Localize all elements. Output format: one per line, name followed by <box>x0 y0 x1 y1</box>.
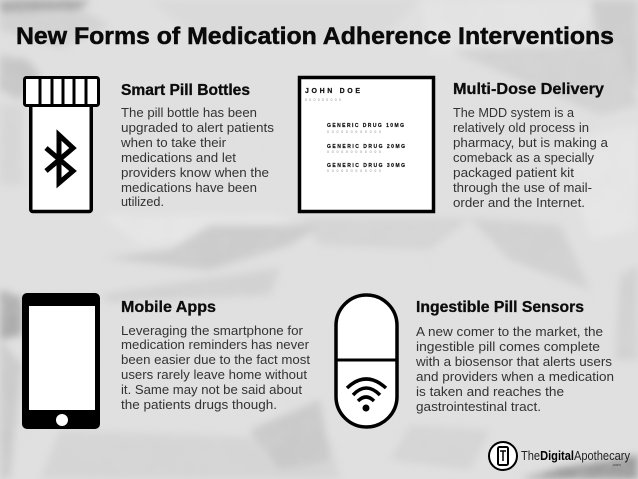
panel: ingestible pill sensors text: Ingestible Pill Sensors <box>416 299 584 316</box>
icon: multi-dose label: GENERIC DRUG 10MG <box>327 123 404 129</box>
panel: smart pill bottles text: Smart Pill Bottles <box>121 82 250 99</box>
panel: mobile apps text: medication reminders has never <box>121 338 309 352</box>
panel: multi-dose delivery text <box>453 81 608 210</box>
panel: multi-dose delivery text: Multi-Dose Delivery <box>453 81 604 98</box>
panel: mobile apps text: users rarely leave home without <box>121 368 308 382</box>
panel: ingestible pill sensors text: and providers when a medication <box>416 370 614 384</box>
panel: ingestible pill sensors text: with a biosensor that alerts users <box>415 355 612 369</box>
logo: The Digital Apothecary <box>489 442 631 470</box>
panel: smart pill bottles text: upgraded to alert patients <box>121 121 274 135</box>
panel: multi-dose delivery text: comeback as a specially <box>453 151 595 165</box>
panel: mobile apps text <box>121 299 311 412</box>
panel: ingestible pill sensors text <box>415 299 614 414</box>
panel: smart pill bottles text: medications and let <box>121 151 237 165</box>
panel: smart pill bottles text: medications have been <box>121 181 257 195</box>
panel: ingestible pill sensors text: A new comer to the market, the <box>416 325 603 339</box>
panel: mobile apps text: it. Same may not be said about <box>121 383 303 397</box>
panel: mobile apps text: Mobile Apps <box>121 299 216 316</box>
panel: ingestible pill sensors text: gastrointestinal tract. <box>416 400 541 414</box>
panel: mobile apps text: the patients drugs though. <box>121 398 277 412</box>
panel: smart pill bottles text: when to take their <box>120 136 226 150</box>
icon: multi-dose label: 0 0 0 0 0 0 0 0 0 0 0 0 <box>327 130 381 134</box>
panel: mobile apps text: been easier due to the fact most <box>121 353 311 367</box>
icon: mobile phone <box>22 293 100 429</box>
icon: multi-dose label: GENERIC DRUG 20MG <box>327 144 405 150</box>
icon: multi-dose label: JOHN DOE <box>305 88 360 95</box>
panel: smart pill bottles text: utilized. <box>121 195 164 209</box>
panel: multi-dose delivery text: relatively old process in <box>453 121 589 135</box>
icon: multi-dose label: 0 0 0 0 0 0 0 0 0 0 0 0 <box>327 150 381 154</box>
panel: ingestible pill sensors text: ingestible pill comes complete <box>416 340 600 354</box>
panel: multi-dose delivery text: through the use of mail- <box>453 181 592 195</box>
icon: smart pill bottle <box>24 78 98 212</box>
panel: multi-dose delivery text: The MDD system is a <box>453 106 574 120</box>
panel: smart pill bottles text <box>120 82 274 209</box>
icon: wifi signal <box>347 379 386 412</box>
icon: ingestible pill sensor <box>335 295 398 427</box>
logo: The Digital Apothecary: .com <box>612 462 621 467</box>
icon: bluetooth symbol <box>46 135 73 183</box>
title: New Forms of Medication Adherence Interventions <box>16 23 614 50</box>
panel: multi-dose delivery text: pharmacy, but is making a <box>453 136 608 150</box>
panel: smart pill bottles text: providers know when the <box>121 166 269 180</box>
panel: mobile apps text: Leveraging the smartphone for <box>121 324 303 338</box>
panel: multi-dose delivery text: order and the Internet. <box>453 196 585 210</box>
icon: multi-dose label: GENERIC DRUG 30MG <box>327 163 405 169</box>
panel: ingestible pill sensors text: is taken and reaches the <box>416 385 564 399</box>
panel: smart pill bottles text: The pill bottle has been <box>121 106 257 120</box>
icon: multi-dose label <box>300 78 434 212</box>
icon: multi-dose label: 0 0 0 0 0 0 0 0 0 <box>305 98 341 102</box>
icon: multi-dose label: 0 0 0 0 0 0 0 0 0 0 0 0 <box>327 169 381 173</box>
logo: The Digital Apothecary: TheDigitalApothecary <box>521 449 631 463</box>
panel: multi-dose delivery text: packaged patient kit <box>453 166 575 180</box>
